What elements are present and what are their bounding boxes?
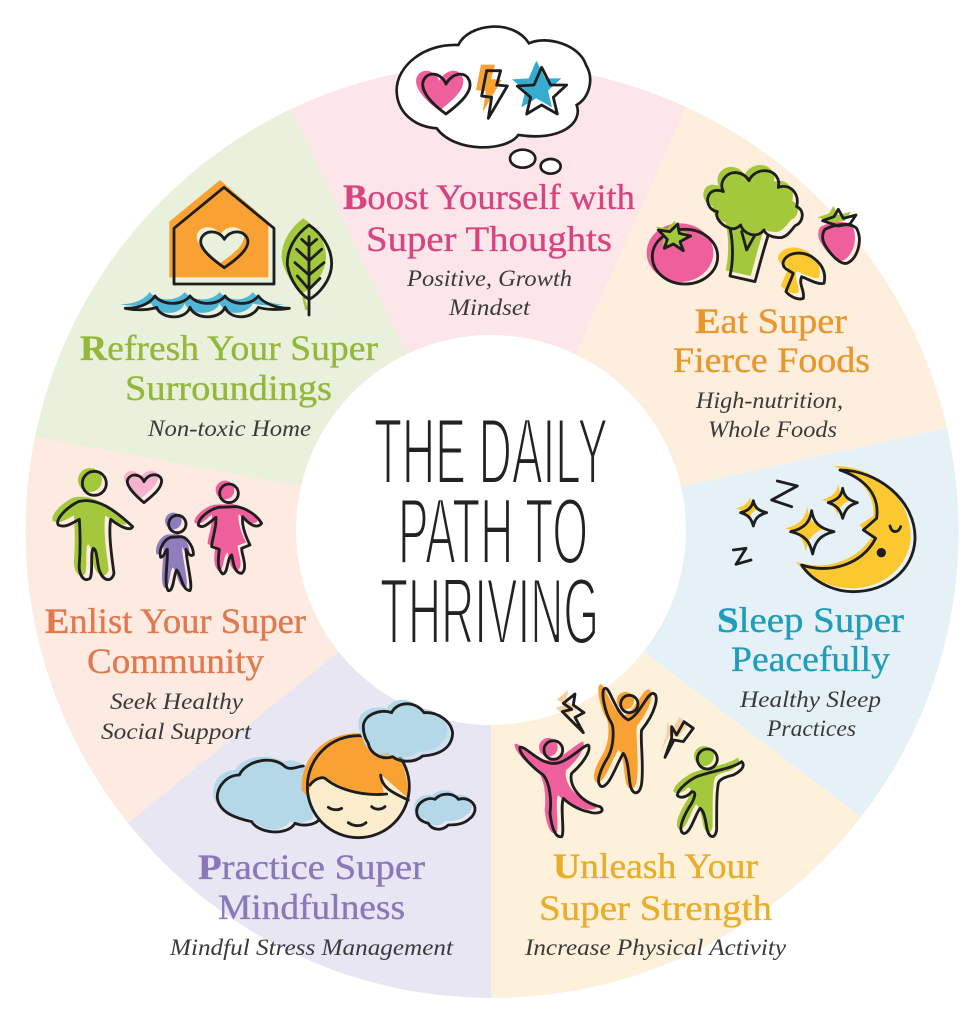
- icon: sleeping face with clouds: [213, 700, 475, 838]
- segment: boost: [291, 64, 686, 354]
- heading: enlist: Enlist Your Super: [45, 601, 306, 641]
- heading: practice: Practice Super: [198, 847, 425, 887]
- subtitle: Non-toxic Home: [147, 416, 311, 441]
- heading: refresh: Refresh Your Super: [80, 328, 378, 368]
- segment: sleep: [644, 428, 959, 817]
- title: PATH TO: [398, 478, 588, 584]
- subtitle: Positive, Growth: [406, 266, 572, 291]
- heading: unleash: Unleash Your: [553, 846, 758, 886]
- heading: sleep: Sleep Super: [717, 600, 904, 640]
- panel: enlist community: [25, 437, 339, 823]
- segment: refresh: [35, 109, 406, 487]
- icon: house, leaf and water: [120, 180, 332, 317]
- title: [374, 398, 608, 664]
- segment: enlist: [25, 437, 339, 823]
- subtitle: Mindful Stress Management: [169, 935, 454, 960]
- subtitle: High-nutrition,: [695, 388, 843, 413]
- title: THRIVING: [380, 558, 599, 664]
- subtitle line 2: Practices: [766, 716, 856, 741]
- panel: unleash strength: [491, 652, 861, 998]
- heading: boost: Boost Yourself with: [343, 177, 635, 217]
- panel: eat foods: [576, 107, 947, 487]
- segment: unleash: [491, 652, 861, 998]
- subtitle line 2: Social Support: [101, 719, 252, 744]
- panel: practice mindfulness: [128, 652, 491, 998]
- panel: refresh surroundings: [35, 109, 406, 487]
- panel: sleep peacefully: [644, 428, 959, 817]
- subtitle: Healthy Sleep: [739, 687, 881, 712]
- segment: practice: [128, 652, 491, 998]
- heading line 2: Community: [87, 641, 264, 681]
- subtitle: Increase Physical Activity: [524, 935, 787, 960]
- center hub: [296, 335, 686, 725]
- heading line 2: Surroundings: [125, 368, 332, 408]
- subtitle line 2: Whole Foods: [708, 417, 837, 442]
- subtitle line 2: Mindset: [448, 295, 531, 320]
- heading line 2: Peacefully: [731, 639, 890, 679]
- icon: family with heart: [52, 468, 262, 591]
- heading line 2: Mindfulness: [218, 887, 405, 927]
- segment: eat: [576, 107, 947, 487]
- text: THE DAILY: [374, 398, 608, 504]
- subtitle: Seek Healthy: [110, 689, 244, 714]
- heading line 2: Fierce Foods: [673, 340, 870, 380]
- icon: jumping people: [515, 684, 743, 837]
- heading: eat: Eat Super: [695, 301, 847, 341]
- icon: thought bubble: [397, 27, 590, 174]
- panel: boost thoughts: [291, 27, 686, 354]
- heading line 2: Super Thoughts: [366, 219, 612, 259]
- icon: moon and stars: [733, 466, 915, 592]
- heading line 2: Super Strength: [539, 888, 772, 928]
- icon: tomato, broccoli, mushroom, strawberry: [647, 165, 859, 299]
